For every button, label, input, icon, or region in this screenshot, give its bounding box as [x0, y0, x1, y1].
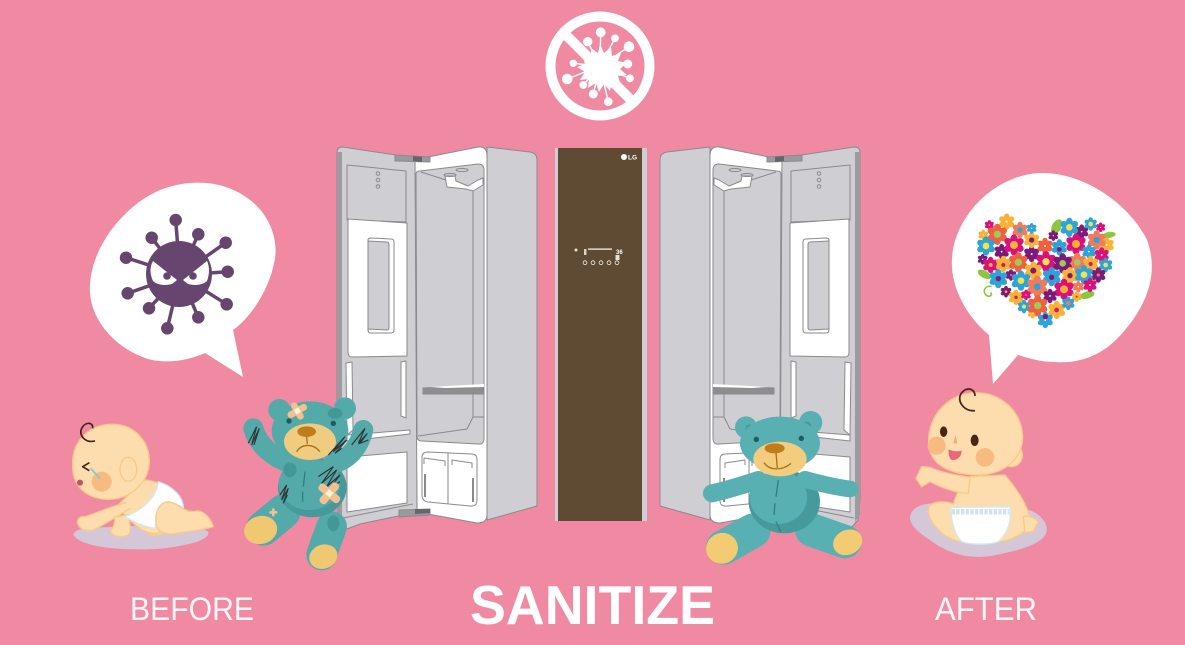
- mouth: [949, 449, 962, 460]
- diaper: [125, 482, 183, 528]
- arms: [253, 428, 363, 463]
- teddy bear: clean: [702, 411, 866, 568]
- cavity back lines: [418, 172, 484, 436]
- eyes: [754, 436, 804, 442]
- door indicators: [376, 172, 380, 188]
- reaching arm: [916, 467, 970, 493]
- drawer: [422, 452, 477, 506]
- legs: [263, 512, 332, 555]
- baby: happy: [910, 389, 1047, 557]
- frown: [297, 437, 320, 452]
- open steamer: left: [337, 147, 537, 529]
- steam shelf: [423, 385, 484, 394]
- ears: [268, 397, 356, 421]
- icon: angry virus: [122, 216, 232, 333]
- control panel: [574, 248, 623, 265]
- head: [740, 417, 820, 470]
- speech bubble: before: [90, 183, 276, 377]
- eyes: [286, 418, 336, 426]
- cheeks: [928, 437, 994, 467]
- hanger: [445, 176, 483, 191]
- head: [272, 401, 348, 460]
- muzzle: [284, 423, 336, 460]
- control panel: 36: [616, 250, 623, 256]
- plaster body: [311, 475, 347, 511]
- legs: [723, 530, 845, 547]
- LG logo: LG: [628, 154, 637, 162]
- tear: [91, 468, 100, 479]
- far hand: [1023, 516, 1038, 533]
- leg: [156, 502, 213, 534]
- door: [337, 147, 417, 529]
- inner cavity: [416, 164, 484, 444]
- cheek: [92, 472, 112, 492]
- nose: [953, 435, 957, 443]
- muzzle: [753, 442, 807, 476]
- mouth: [77, 480, 83, 486]
- icon: flower heart: [976, 213, 1116, 328]
- body: [749, 470, 820, 533]
- body: [278, 457, 347, 517]
- hinge bottom: [399, 509, 430, 517]
- hair curl: [81, 423, 95, 441]
- nose: [765, 443, 785, 453]
- torso and legs: [928, 475, 1030, 543]
- ear: [120, 457, 137, 481]
- smile: [764, 453, 791, 469]
- speech bubble: after: [952, 173, 1152, 384]
- nose: [297, 426, 316, 437]
- label: before: BEFORE: [130, 591, 254, 627]
- head: [73, 424, 149, 499]
- stitches: [774, 480, 781, 532]
- cabinet front frame: [413, 147, 487, 523]
- hanger ovals: [444, 168, 468, 176]
- plaster leg: [269, 508, 277, 516]
- plaster head: [283, 398, 311, 424]
- label: after: AFTER: [935, 591, 1037, 627]
- door window: [368, 238, 394, 333]
- icon: no germs: [550, 16, 650, 116]
- scribbles: [248, 427, 368, 503]
- floor shadow: [910, 504, 1047, 557]
- teddy bear: worn: [241, 397, 368, 573]
- body patches: [283, 408, 342, 531]
- paw soles: [241, 512, 341, 573]
- baby: crying: [73, 423, 213, 549]
- door lower panel: [347, 452, 407, 512]
- hinge top: [395, 155, 430, 162]
- paw soles: [702, 525, 866, 568]
- title: SANITIZE: [470, 574, 715, 636]
- door lower strips: [346, 361, 410, 441]
- eyes: [940, 426, 979, 446]
- head: [929, 393, 1023, 475]
- eye: [83, 463, 89, 471]
- door top panel: [347, 165, 406, 222]
- ear: [1001, 443, 1022, 467]
- door white panel: [348, 219, 407, 357]
- ear inners: [745, 421, 811, 432]
- open steamer: right: [660, 147, 860, 529]
- cabinet side: [487, 147, 537, 520]
- ears: [735, 411, 822, 438]
- arms: [712, 479, 850, 493]
- LG logo: [621, 154, 637, 162]
- floor shadow: [73, 525, 208, 549]
- hair curl: [960, 389, 975, 411]
- closed steamer: centre: [555, 148, 647, 521]
- diaper: [951, 507, 1010, 544]
